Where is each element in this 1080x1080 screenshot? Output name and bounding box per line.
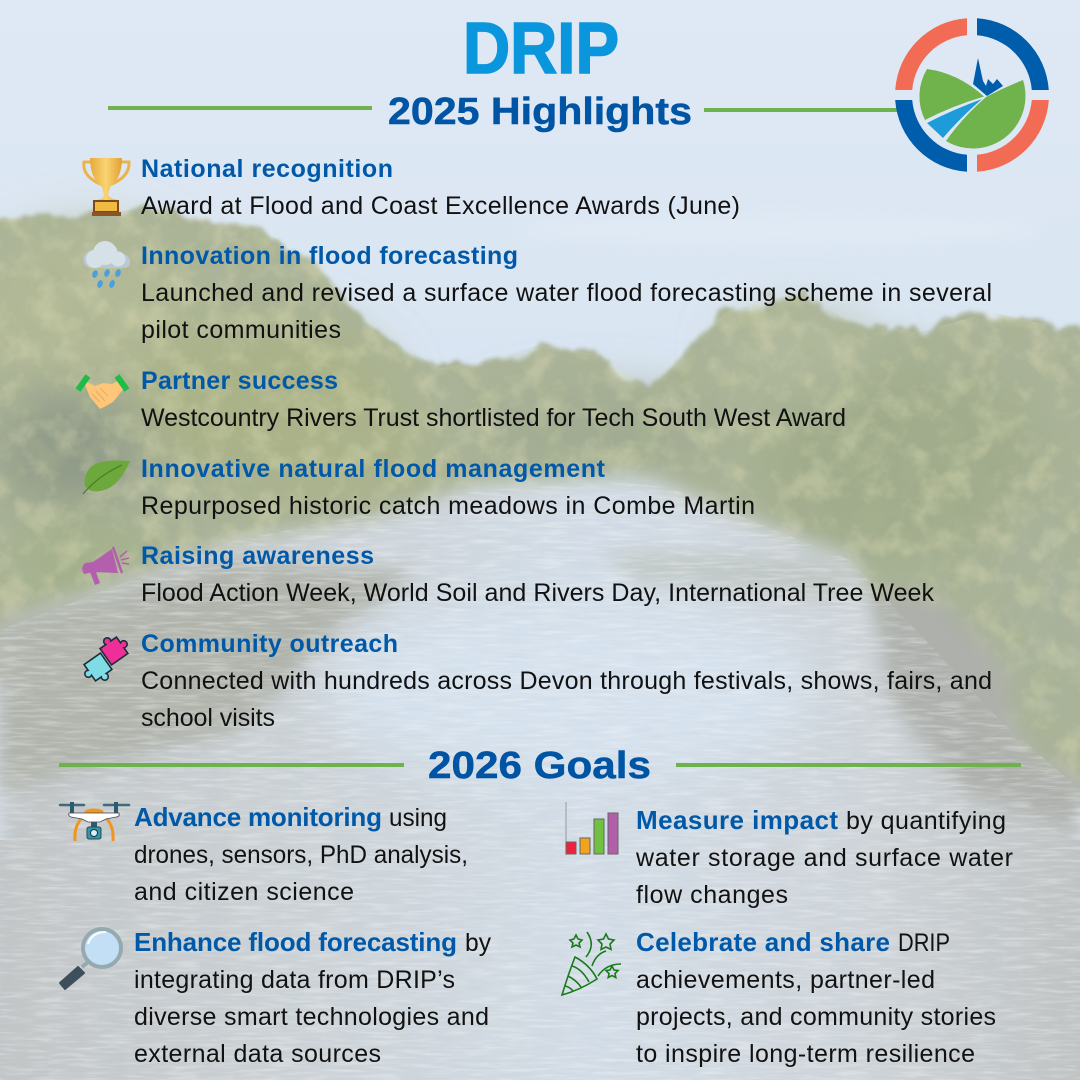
highlight: community outreach (80, 630, 992, 732)
title: DRIP: DRIP (463, 9, 619, 89)
text: Enhance flood forecasting (134, 927, 457, 957)
text: water storage and surface water (635, 844, 1013, 872)
icon: trophy (84, 158, 129, 216)
heading: Partner success (141, 367, 338, 395)
icon: bar chart (566, 802, 618, 855)
text (636, 927, 996, 1068)
section: 2025 highlights (78, 155, 992, 732)
icon: leaf (83, 461, 130, 494)
heading: Raising awareness (141, 542, 374, 570)
heading: 2026 Goals: 2026 Goals (428, 745, 651, 787)
goal: enhance flood forecasting (60, 927, 491, 1068)
heading: 2025 Highlights: 2025 Highlights (388, 91, 692, 133)
goal: measure impact (566, 802, 1013, 909)
icon: rain cloud (83, 241, 130, 289)
icon: puzzle pieces (80, 630, 132, 688)
icon: magnifying glass (60, 929, 121, 989)
text: Flood Action Week, World Soil and Rivers Day, International Tree Week (141, 579, 934, 607)
highlight: partner success (78, 367, 846, 432)
text: and citizen science (134, 878, 354, 906)
text (141, 667, 992, 732)
heading: Innovative natural flood management (141, 455, 606, 483)
heading: Community outreach (141, 630, 398, 658)
text: Measure impact (636, 805, 838, 835)
icon: handshake (78, 376, 127, 409)
text: Launched and revised a surface water flood forecasting scheme in several (141, 279, 992, 307)
text: by quantifying (846, 807, 1006, 835)
text: Repurposed historic catch meadows in Combe Martin (141, 492, 755, 520)
text (134, 927, 491, 1068)
text: Award at Flood and Coast Excellence Awards (June) (141, 192, 740, 220)
text: diverse smart technologies and (134, 1003, 489, 1031)
highlight: flood forecasting (83, 241, 992, 344)
text: to inspire long-term resilience (636, 1040, 975, 1068)
text: projects, and community stories (636, 1003, 996, 1031)
highlight: national recognition (84, 155, 740, 220)
highlight: raising awareness (82, 542, 934, 607)
text: Connected with hundreds across Devon through festivals, shows, fairs, and (141, 667, 992, 695)
heading: Innovation in flood forecasting (141, 242, 518, 270)
text (141, 279, 992, 344)
text: DRIP (898, 929, 950, 957)
icon: drone (60, 802, 129, 841)
text (635, 805, 1013, 909)
text: by (465, 929, 491, 957)
highlight: natural flood management (83, 455, 755, 520)
goal: celebrate and share (562, 927, 996, 1068)
icon: megaphone (82, 547, 129, 585)
river reflections (0, 560, 420, 790)
text: Westcountry Rivers Trust shortlisted for Tech South West Award (141, 404, 846, 432)
text: achievements, partner-led (636, 966, 935, 994)
text: Advance monitoring (134, 802, 382, 832)
heading: National recognition (141, 155, 393, 183)
icon: party popper (562, 932, 621, 995)
section: 2026 goals (60, 802, 1013, 1068)
text: using (389, 804, 447, 832)
text (134, 802, 468, 906)
text: flow changes (636, 881, 788, 909)
text: school visits (141, 704, 275, 732)
logo: DRIP roundel (895, 18, 1049, 172)
text: integrating data from DRIP’s (134, 966, 455, 994)
text: pilot communities (141, 316, 341, 344)
text: Celebrate and share (636, 927, 890, 957)
goal: advance monitoring (60, 802, 468, 906)
water body (0, 840, 1080, 1080)
text: drones, sensors, PhD analysis, (134, 841, 468, 869)
text: external data sources (134, 1040, 381, 1068)
